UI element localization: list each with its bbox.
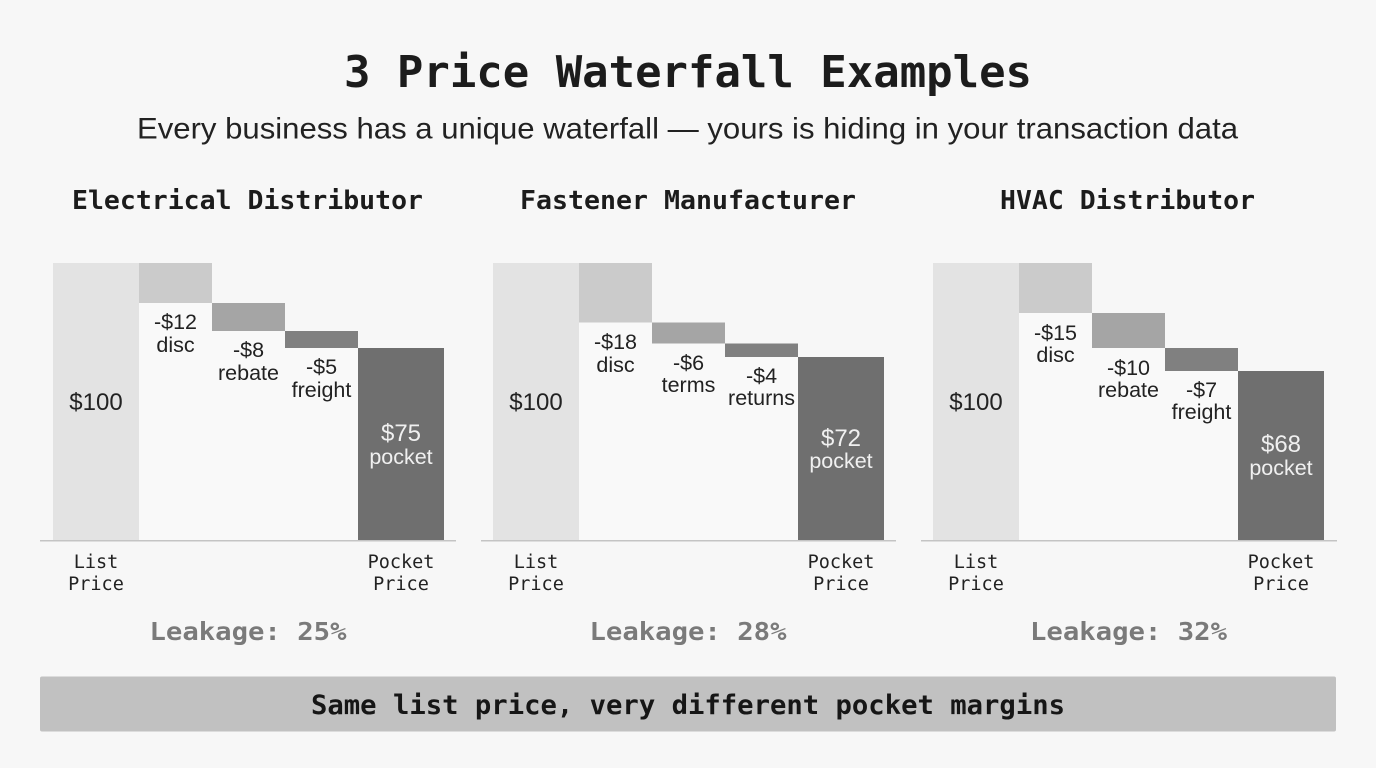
axis label: pocket price: Price: [813, 574, 869, 595]
bar: pocket price: [358, 348, 444, 540]
leakage figure: Leakage: 28%: [590, 617, 786, 646]
axis label: pocket price: Price: [373, 574, 429, 595]
callout banner: Same list price, very different pocket margins: [311, 690, 1065, 721]
bar: terms step: terms: [662, 373, 715, 397]
bar: rebate step: [1092, 313, 1165, 402]
bar: discount step: disc: [596, 353, 635, 377]
bar: freight step: freight: [292, 378, 351, 402]
axis label: pocket price: [368, 552, 434, 595]
bar: list price: [53, 263, 139, 540]
bar: freight step: -$5: [306, 355, 337, 379]
axis label: list price: List: [74, 552, 118, 573]
bar: discount step: -$15: [1034, 321, 1077, 345]
callout banner: [40, 676, 1336, 732]
bar: returns step: returns: [728, 386, 795, 410]
bar: list price: $100: [949, 389, 1003, 416]
axis label: list price: Price: [948, 574, 1004, 595]
leakage figure: Leakage: 25%: [150, 617, 346, 646]
axis label: list price: Price: [508, 574, 564, 595]
bar: discount step: -$18: [594, 330, 637, 354]
bar: discount step: [139, 263, 212, 357]
axis label: pocket price: Price: [1253, 574, 1309, 595]
bar: list price: $100: [69, 389, 123, 416]
bar: list price: [933, 263, 1019, 540]
bar: pocket price: pocket: [1249, 456, 1313, 480]
title: 3 Price Waterfall Examples: [344, 47, 1032, 98]
bar: rebate step: rebate: [1098, 378, 1159, 402]
bar: list price: [493, 263, 579, 540]
bar: rebate step: -$10: [1107, 356, 1150, 380]
axis label: list price: [948, 552, 1004, 595]
subtitle: Every business has a unique waterfall — yours is hiding in your transaction data: [137, 112, 1238, 146]
bar: rebate step: -$8: [233, 338, 264, 362]
panel: Electrical Distributor: [40, 186, 456, 646]
bar: freight step: [285, 331, 358, 402]
bar: discount step: disc: [156, 333, 195, 357]
panel: Fastener Manufacturer: [481, 186, 896, 646]
heading: Fastener Manufacturer: Fastener Manufacturer: [520, 186, 856, 216]
bar: freight step: freight: [1172, 400, 1231, 424]
axis label: pocket price: [808, 552, 874, 595]
bar: terms step: [652, 322, 725, 397]
bar: discount step: disc: [1036, 343, 1075, 367]
bar: freight step: [1165, 348, 1238, 424]
bar: rebate step: [212, 303, 285, 385]
bar: rebate step: rebate: [218, 361, 279, 385]
heading: Electrical Distributor: Electrical Distributor: [72, 186, 423, 216]
panel: HVAC Distributor: [921, 186, 1337, 646]
bar: list price: $100: [509, 389, 563, 416]
axis label: pocket price: [1248, 552, 1314, 595]
bar: pocket price: [798, 357, 884, 540]
bar: pocket price: [1238, 371, 1324, 540]
bar: terms step: -$6: [673, 351, 704, 375]
axis label: pocket price: Pocket: [368, 552, 434, 573]
bar: discount step: [1019, 263, 1092, 367]
bar: pocket price: $68: [1261, 431, 1301, 458]
bar: pocket price: pocket: [809, 449, 873, 473]
axis label: list price: [508, 552, 564, 595]
bar: pocket price: $75: [381, 420, 421, 447]
axis label: list price: [68, 552, 124, 595]
bar: pocket price: $72: [821, 425, 861, 452]
bar: returns step: [725, 344, 798, 410]
bar: returns step: -$4: [746, 364, 777, 388]
axis label: list price: Price: [68, 574, 124, 595]
bar: freight step: -$7: [1186, 378, 1217, 402]
leakage figure: Leakage: 32%: [1030, 617, 1227, 646]
axis label: pocket price: Pocket: [808, 552, 874, 573]
heading: HVAC Distributor: HVAC Distributor: [1000, 186, 1255, 216]
bar: discount step: [579, 263, 652, 377]
bar: pocket price: pocket: [369, 445, 433, 469]
axis label: pocket price: Pocket: [1248, 552, 1314, 573]
axis label: list price: List: [954, 552, 998, 573]
bar: discount step: -$12: [154, 310, 197, 334]
axis label: list price: List: [514, 552, 558, 573]
